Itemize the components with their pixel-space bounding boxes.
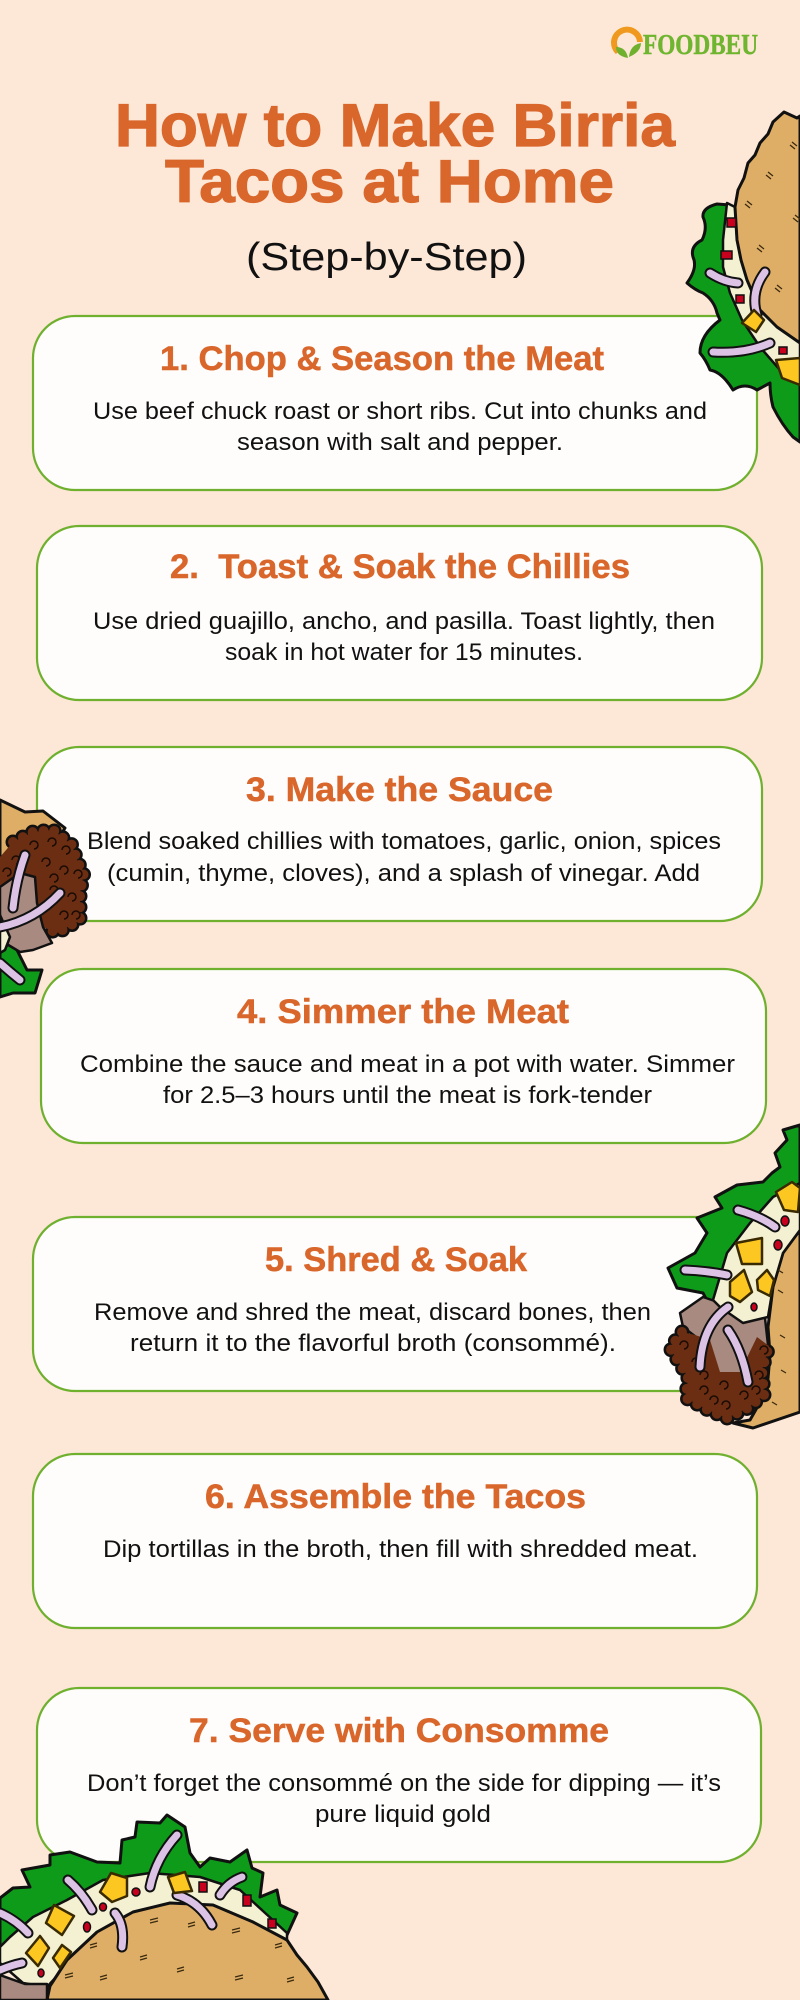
text: step 7: pure liquid gold (315, 1801, 491, 1828)
text: step 7 (87, 1770, 721, 1828)
text: step 3: (cumin, thyme, cloves), and a splash of vinegar. Add (107, 860, 700, 887)
text: step 4: Combine the sauce and meat in a pot with water. Simmer (80, 1051, 735, 1078)
subtitle: (Step-by-Step) (246, 236, 527, 279)
text: step 2 (93, 608, 715, 666)
icon: taco top right (687, 112, 800, 442)
panel: step 7 (37, 1688, 761, 1862)
heading: step 5: 5. Shred & Soak (265, 1241, 527, 1279)
panel: step 5 (33, 1217, 757, 1391)
icon: taco right (668, 1125, 800, 1428)
text: step 2: soak in hot water for 15 minutes. (225, 639, 583, 666)
title (115, 92, 676, 215)
text: step 7: Don’t forget the consommé on the side for dipping — it’s (87, 1770, 721, 1797)
panel: step 2 (37, 526, 762, 700)
icon: taco left (0, 800, 84, 997)
logo wordmark: FOODBEU (643, 30, 758, 61)
text: step 1: Use beef chuck roast or short ribs. Cut into chunks and (93, 398, 707, 425)
heading: step 2: 2. Toast & Soak the Chillies (170, 548, 630, 586)
icon: taco bottom left (0, 1815, 328, 2000)
text: step 5: return it to the flavorful broth (consommé). (130, 1330, 616, 1357)
text: step 1 (93, 398, 707, 456)
text: step 6: Dip tortillas in the broth, then fill with shredded meat. (103, 1536, 698, 1563)
panel: step 6 (33, 1454, 757, 1628)
text: step 4 (80, 1051, 735, 1109)
logo: Foodbeu (614, 30, 758, 61)
heading: step 3: 3. Make the Sauce (246, 771, 553, 809)
text: step 1: season with salt and pepper. (237, 429, 563, 456)
heading: step 1: 1. Chop & Season the Meat (160, 340, 604, 378)
text: step 2: Use dried guajillo, ancho, and pasilla. Toast lightly, then (93, 608, 715, 635)
text: step 5: Remove and shred the meat, discard bones, then (94, 1299, 651, 1326)
text: step 3: Blend soaked chillies with tomatoes, garlic, onion, spices (87, 828, 721, 855)
heading: step 7: 7. Serve with Consomme (189, 1712, 609, 1750)
panel: step 1 (33, 316, 757, 490)
text: step 3 (87, 828, 721, 887)
text: step 5 (94, 1299, 651, 1357)
heading: step 6: 6. Assemble the Tacos (205, 1478, 586, 1516)
icon: logo leaf and sun (614, 30, 641, 58)
title: Tacos at Home (165, 148, 614, 215)
heading: step 4: 4. Simmer the Meat (237, 993, 569, 1031)
panel: step 3 (37, 747, 762, 921)
title: How to Make Birria (115, 92, 676, 159)
panel: step 4 (41, 969, 766, 1143)
text: step 4: for 2.5–3 hours until the meat is fork-tender (163, 1082, 652, 1109)
